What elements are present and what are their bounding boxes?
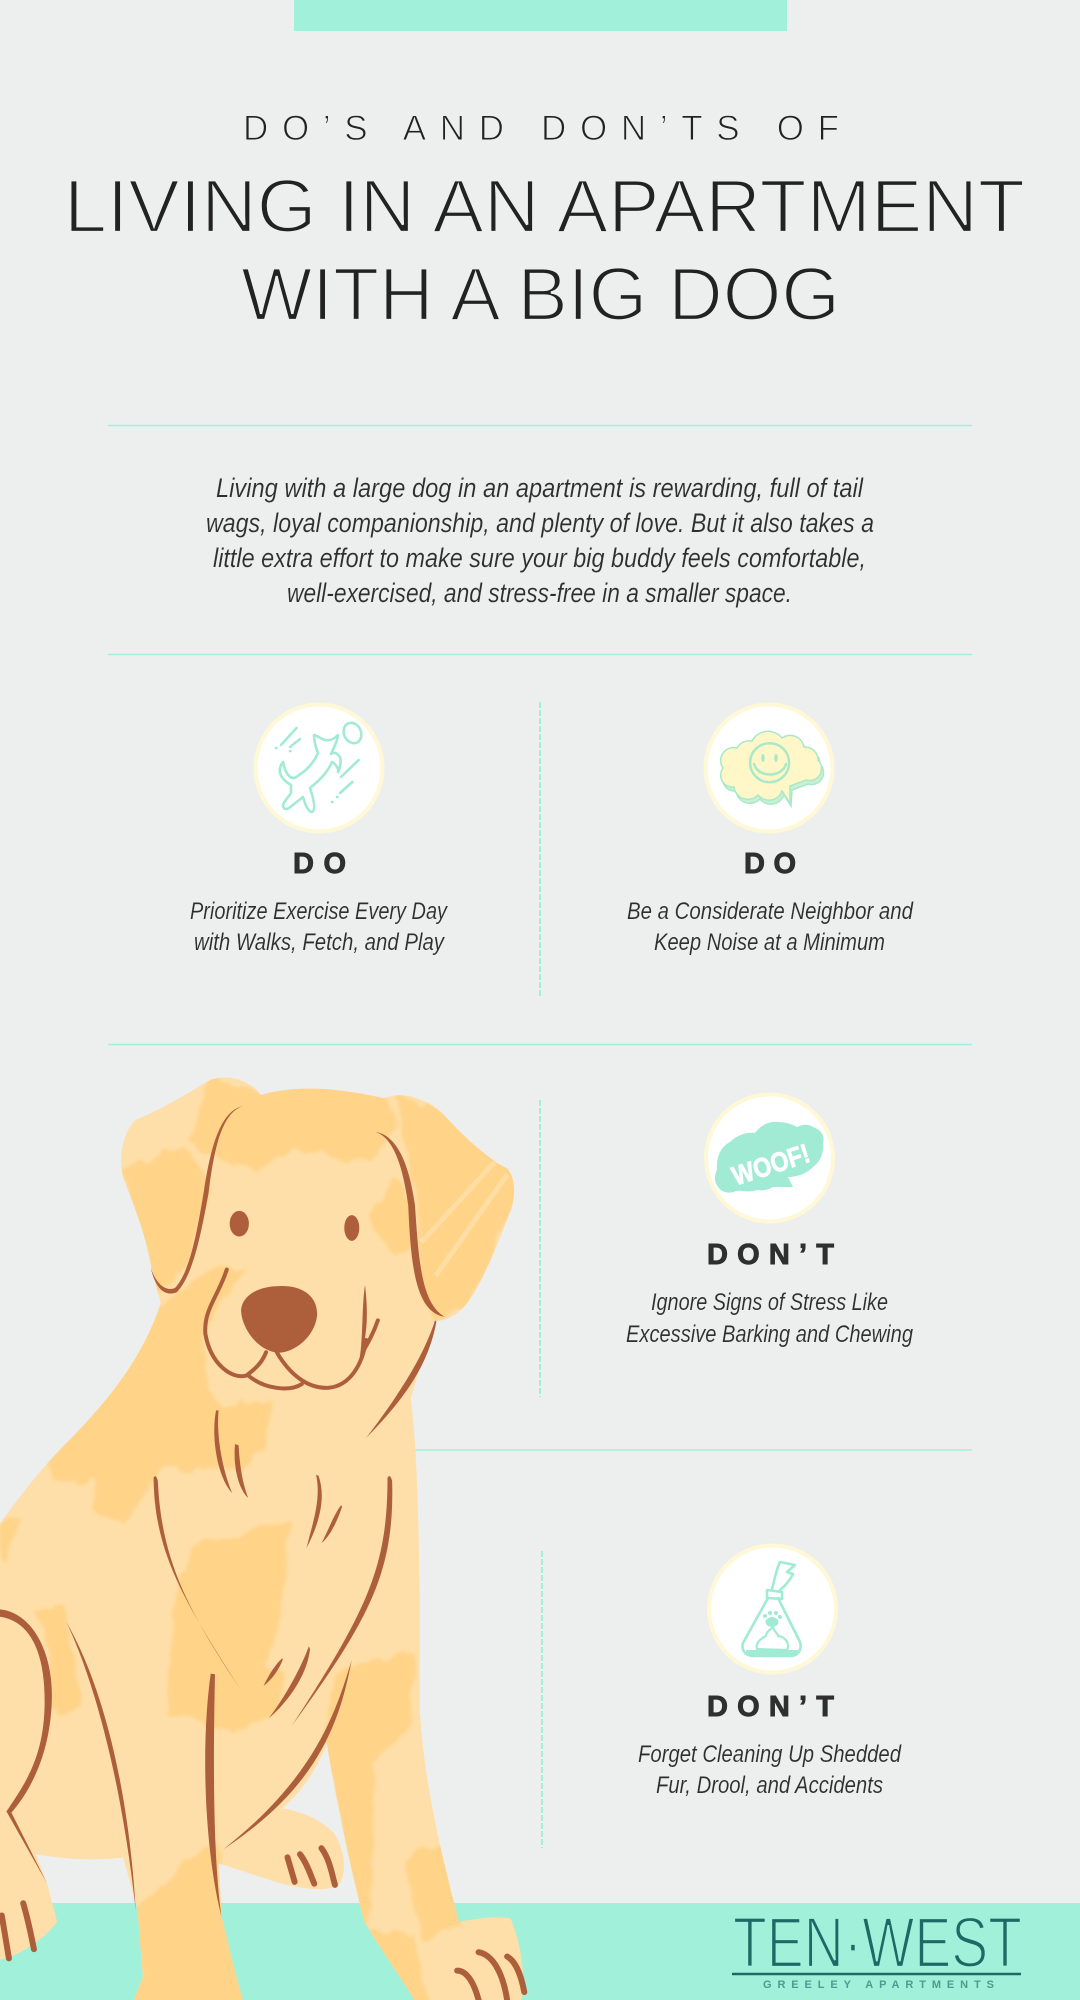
icon: smiley thought cloud (706, 704, 832, 832)
description (638, 1741, 902, 1799)
title (64, 109, 1025, 336)
description: Be a Considerate Neighbor and (627, 898, 914, 925)
logo: Ten West Greeley Apartments: GREELEY APARTMENTS (763, 1979, 994, 1991)
bottom teal band (0, 1903, 1080, 2000)
icon: waste bag (709, 1546, 836, 1672)
description: Forget Cleaning Up Shedded (638, 1741, 902, 1768)
icon: woof bubble: WOOF! (728, 1138, 814, 1191)
dog body silhouette (0, 1077, 523, 2000)
description: Ignore Signs of Stress Like (651, 1289, 888, 1316)
description: Excessive Barking and Chewing (626, 1321, 913, 1348)
description (190, 898, 448, 956)
title: WITH A BIG DOG (241, 252, 840, 336)
dog eyes and nose (230, 1211, 359, 1353)
heading: do: DO (293, 848, 346, 880)
intro text: well-exercised, and stress-free in a smaller space. (287, 578, 792, 608)
heading: don't: DON’T (707, 1239, 834, 1271)
title: LIVING IN AN APARTMENT (64, 164, 1025, 248)
dog mouth and toes (2, 1270, 524, 2000)
dog darker fur patches (0, 1077, 518, 2000)
title: DO’S AND DON’TS OF (243, 109, 839, 148)
panel: don't ignore stress (626, 1094, 913, 1348)
right ear light streaks (421, 1156, 507, 1276)
panel: don't forget cleaning (638, 1546, 902, 1799)
illustration: golden dog (0, 1077, 524, 2000)
intro text (206, 473, 874, 608)
intro text: Living with a large dog in an apartment is rewarding, full of tail (216, 473, 864, 503)
intro text: little extra effort to make sure your big buddy feels comfortable, (213, 543, 866, 573)
heading: don't: DON’T (707, 1691, 834, 1723)
icon: jumping dog with frisbee (256, 704, 382, 832)
description: Prioritize Exercise Every Day (190, 898, 448, 925)
panel: do be considerate (627, 704, 914, 956)
description (627, 898, 914, 956)
description (626, 1289, 913, 1348)
description: Fur, Drool, and Accidents (656, 1772, 883, 1799)
intro text: wags, loyal companionship, and plenty of love. But it also takes a (206, 508, 874, 538)
icon: woof bubble (706, 1094, 833, 1222)
top accent bar (294, 0, 787, 31)
description: Keep Noise at a Minimum (654, 929, 885, 956)
heading: do: DO (744, 848, 796, 880)
dog tapered fur lines (0, 1106, 445, 1917)
description: with Walks, Fetch, and Play (194, 929, 445, 956)
panel: do exercise (190, 704, 448, 956)
